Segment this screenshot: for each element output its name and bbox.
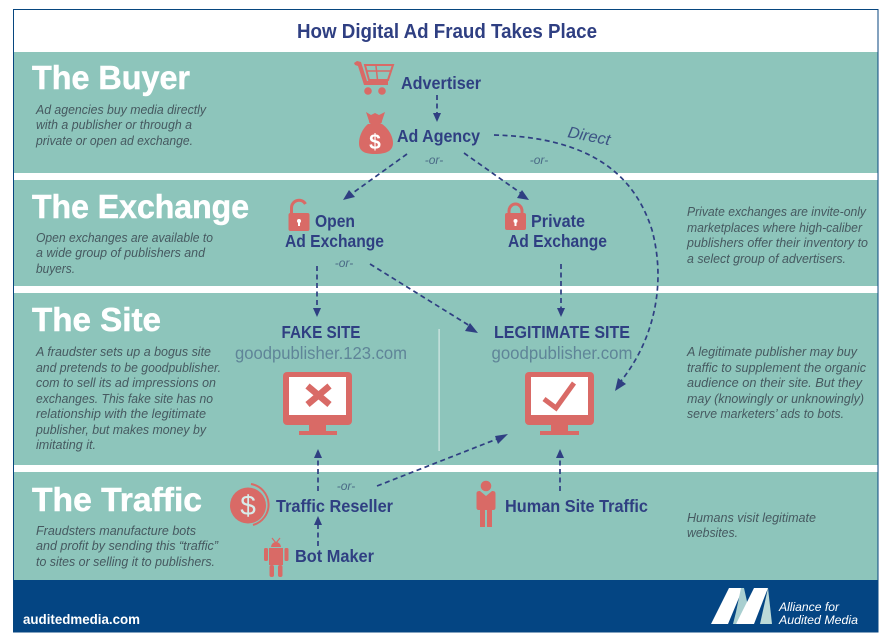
text: or: -or- bbox=[337, 479, 355, 493]
icon: monitor with check bbox=[525, 372, 594, 435]
text: or: -or- bbox=[425, 153, 443, 167]
text: legitimate publisher description: A legitimate publisher may buy bbox=[686, 345, 858, 359]
text: site description: imitating it. bbox=[36, 438, 96, 452]
text: traffic description bbox=[36, 524, 219, 569]
arrow: open exchange to fake site bbox=[313, 266, 321, 317]
text: buyer description bbox=[35, 103, 207, 148]
panel: traffic band bbox=[14, 472, 878, 580]
arrow: bot maker to reseller bbox=[314, 516, 322, 546]
label: Private Ad Exchange: Ad Exchange bbox=[508, 231, 607, 251]
arrow: human traffic to legitimate site bbox=[556, 449, 564, 491]
text: private exchange description: Private exchanges are invite-only bbox=[687, 205, 867, 219]
text: auditedmedia.com: auditedmedia.com bbox=[23, 611, 140, 627]
heading: The Site: The Site bbox=[32, 301, 161, 338]
text: legitimate publisher description: traffic to supplement the organic bbox=[687, 361, 867, 375]
footer band bbox=[14, 580, 878, 632]
text: traffic description: to sites or selling it to publishers. bbox=[36, 555, 215, 569]
text: site description: relationship with the legitimate bbox=[36, 407, 206, 421]
icon: person bbox=[476, 481, 496, 527]
arrow: agency to private exchange bbox=[464, 153, 529, 200]
icon: monitor with X bbox=[283, 372, 352, 435]
icon: closed padlock bbox=[505, 204, 526, 230]
logo: Alliance for Audited Media bbox=[711, 588, 858, 627]
label: Private Ad Exchange bbox=[508, 211, 607, 251]
label: Open Ad Exchange: Ad Exchange bbox=[285, 231, 384, 251]
label: Advertiser: Advertiser bbox=[401, 73, 481, 93]
label: Ad Agency: Ad Agency bbox=[397, 126, 480, 146]
icon: money bag bbox=[359, 112, 393, 154]
text: exchange description: a wide group of publishers and bbox=[36, 246, 206, 260]
text: site description: publisher, but makes money by bbox=[35, 423, 207, 437]
label: Private Ad Exchange: Private bbox=[531, 211, 585, 231]
text: traffic description: and profit by sending this “traffic” bbox=[36, 539, 219, 553]
text: site description: com to sell its ad impressions on bbox=[36, 376, 216, 390]
text: site description bbox=[35, 345, 221, 452]
text: site description: A fraudster sets up a bogus site bbox=[35, 345, 211, 359]
label: Open Ad Exchange: Open bbox=[315, 211, 355, 231]
icon: shopping cart bbox=[354, 61, 393, 95]
text: buyer description: private or open ad exchange. bbox=[35, 134, 193, 148]
divider bbox=[438, 329, 440, 451]
arrow: open exchange to legitimate site bbox=[370, 264, 478, 333]
text: legitimate publisher description: serve marketers’ ads to bots. bbox=[687, 407, 844, 421]
logo: Alliance for Audited Media: Audited Media bbox=[778, 613, 858, 627]
arrow: advertiser to agency bbox=[433, 95, 441, 122]
text: legitimate publisher description: may (knowingly or unknowingly) bbox=[687, 392, 864, 406]
label: LEGITIMATE SITE: LEGITIMATE SITE bbox=[494, 322, 630, 342]
text: exchange description: Open exchanges are available to bbox=[36, 231, 213, 245]
icon: dollar coin: $ bbox=[240, 490, 256, 521]
label: Open Ad Exchange bbox=[285, 211, 384, 251]
text: site description: and pretends to be goodpublisher. bbox=[36, 361, 221, 375]
text: exchange description bbox=[36, 231, 213, 276]
title: How Digital Ad Fraud Takes Place bbox=[297, 21, 597, 43]
text: private exchange description: marketplaces where high-caliber bbox=[687, 221, 863, 235]
icon: open padlock bbox=[288, 200, 310, 231]
logo: Alliance for Audited Media: Alliance for bbox=[778, 600, 840, 614]
text: private exchange description: a select group of advertisers. bbox=[687, 252, 846, 266]
label: goodpublisher.com: goodpublisher.com bbox=[492, 343, 632, 363]
text: traffic description: Fraudsters manufacture bots bbox=[36, 524, 196, 538]
arrow: agency to open exchange bbox=[343, 154, 407, 200]
label: Bot Maker: Bot Maker bbox=[295, 546, 374, 566]
arrow: reseller to fake site bbox=[314, 449, 322, 491]
text: site description: exchanges. This fake site has no bbox=[36, 392, 213, 406]
label: Human Site Traffic: Human Site Traffic bbox=[505, 496, 648, 516]
heading: The Traffic: The Traffic bbox=[32, 481, 202, 518]
text: humans description: websites. bbox=[687, 526, 738, 540]
heading: The Buyer: The Buyer bbox=[32, 59, 190, 96]
text: legitimate publisher description: audience on their site. But they bbox=[687, 376, 863, 390]
text: buyer description: with a publisher or through a bbox=[36, 118, 192, 132]
icon: money bag: $ bbox=[369, 131, 381, 154]
heading: The Exchange: The Exchange bbox=[32, 188, 249, 225]
arrow: private exchange to legitimate site bbox=[557, 264, 565, 317]
text: private exchange description: publishers offer their inventory to bbox=[686, 236, 868, 250]
panel: exchange band bbox=[14, 180, 878, 286]
icon: dollar coin bbox=[230, 484, 269, 525]
label: Traffic Reseller: Traffic Reseller bbox=[276, 496, 393, 516]
arrow: reseller to legitimate site bbox=[377, 434, 508, 486]
arrow: direct curve bbox=[494, 135, 658, 391]
text: humans description: Humans visit legitimate bbox=[687, 511, 816, 525]
text: humans description bbox=[687, 511, 816, 540]
text: or: -or- bbox=[335, 256, 353, 270]
label: Direct: Direct bbox=[566, 124, 612, 149]
label: goodpublisher.123.com: goodpublisher.123.com bbox=[235, 343, 407, 363]
text: legitimate publisher description bbox=[686, 345, 867, 421]
icon: robot bbox=[264, 538, 288, 577]
text: private exchange description bbox=[686, 205, 868, 266]
label: FAKE SITE: FAKE SITE bbox=[282, 322, 360, 342]
panel: site band bbox=[14, 293, 878, 465]
text: buyer description: Ad agencies buy media directly bbox=[35, 103, 207, 117]
panel: buyer band bbox=[14, 52, 878, 173]
text: exchange description: buyers. bbox=[36, 262, 75, 276]
text: or: -or- bbox=[530, 153, 548, 167]
